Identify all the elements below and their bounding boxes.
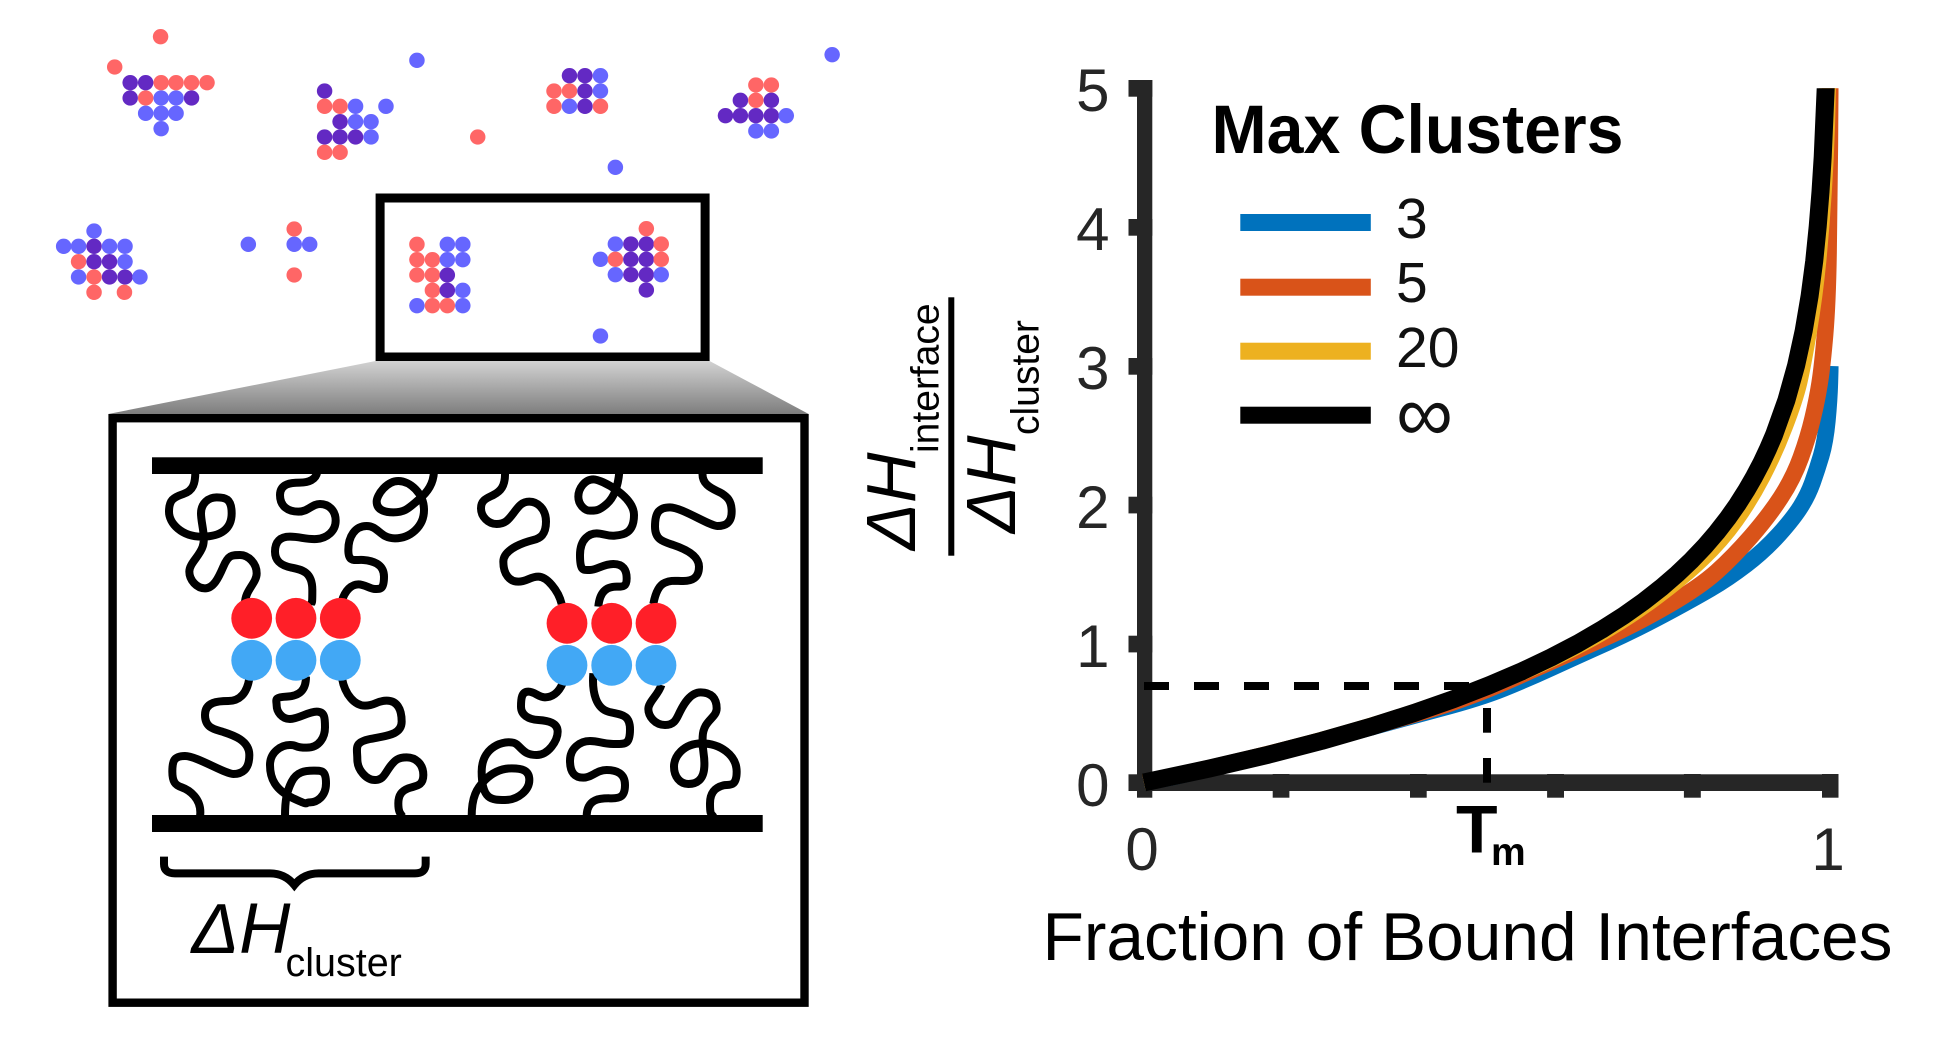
y axis label: interface [904,303,947,453]
y tick labels: 2 [1076,474,1110,541]
lower right linkers [472,673,737,817]
y tick labels [1076,57,1110,819]
left binding sites red [231,598,361,639]
legend entry infinity: ∞ [1396,369,1453,458]
right binding sites blue [547,645,676,686]
cluster 4 [718,77,794,139]
dashed guide: horizontal [1144,682,1469,690]
y axis label [852,297,1047,556]
y tick labels: 5 [1076,57,1110,124]
Tm label: T [1456,792,1498,868]
legend entry 20: 20 [1396,316,1459,380]
curve: max 3 [1144,366,1830,782]
y tick labels: 1 [1076,613,1110,680]
Tm label: m [1491,831,1526,874]
free particles [241,47,840,252]
x tick labels: 1 [1811,816,1845,883]
cluster 5 [56,223,148,300]
legend entry 3 [1240,187,1428,251]
axes [1128,80,1838,798]
Tm label [1456,792,1526,874]
label: delta H cluster: ΔH [190,890,291,969]
legend entry 5: 5 [1396,251,1428,315]
brace [164,857,426,885]
dashed guide: vertical [1483,708,1491,783]
top surface [152,457,763,474]
x tick labels [1125,816,1845,883]
panel: particle clusters [56,29,840,344]
curves [1144,70,1830,782]
legend entry 3: 3 [1396,187,1428,251]
curve: max 20 [1144,70,1828,782]
cluster 7 in inset [593,221,669,344]
y tick labels: 4 [1076,196,1110,263]
curve: max 5 [1144,70,1830,782]
y axis label: cluster [1004,320,1047,435]
cluster 2 [317,83,394,160]
legend title: Max Clusters [1212,91,1624,168]
zoom projection [108,361,809,414]
left binding sites blue [231,640,361,681]
upper left linkers [169,472,434,605]
x tick labels: 0 [1125,816,1159,883]
legend [1212,91,1624,458]
cluster 6 in inset [409,237,471,313]
cluster 1 [107,29,215,136]
small fragment [286,221,317,283]
lower left linkers [172,677,423,817]
legend entry 5 [1240,251,1428,315]
label: delta H cluster: cluster [286,941,402,985]
y tick labels: 3 [1076,335,1110,402]
panel: zoomed interface [113,418,805,1003]
y axis label: ΔH [952,435,1030,535]
curve: max infinity [1144,70,1826,782]
zoom frame [113,418,805,1003]
panel: line chart [852,57,1892,975]
bottom surface [152,815,763,832]
y tick labels: 0 [1076,752,1110,819]
right binding sites red [547,603,676,644]
upper right linkers [481,472,732,607]
cluster 3 [546,68,608,114]
label: delta H cluster [190,890,402,985]
legend entry 20 [1240,316,1459,380]
y axis label: ΔH [852,452,930,552]
x axis title: Fraction of Bound Interfaces [1042,899,1892,975]
inset selection rectangle [380,198,705,357]
legend entry infinity [1240,369,1453,458]
